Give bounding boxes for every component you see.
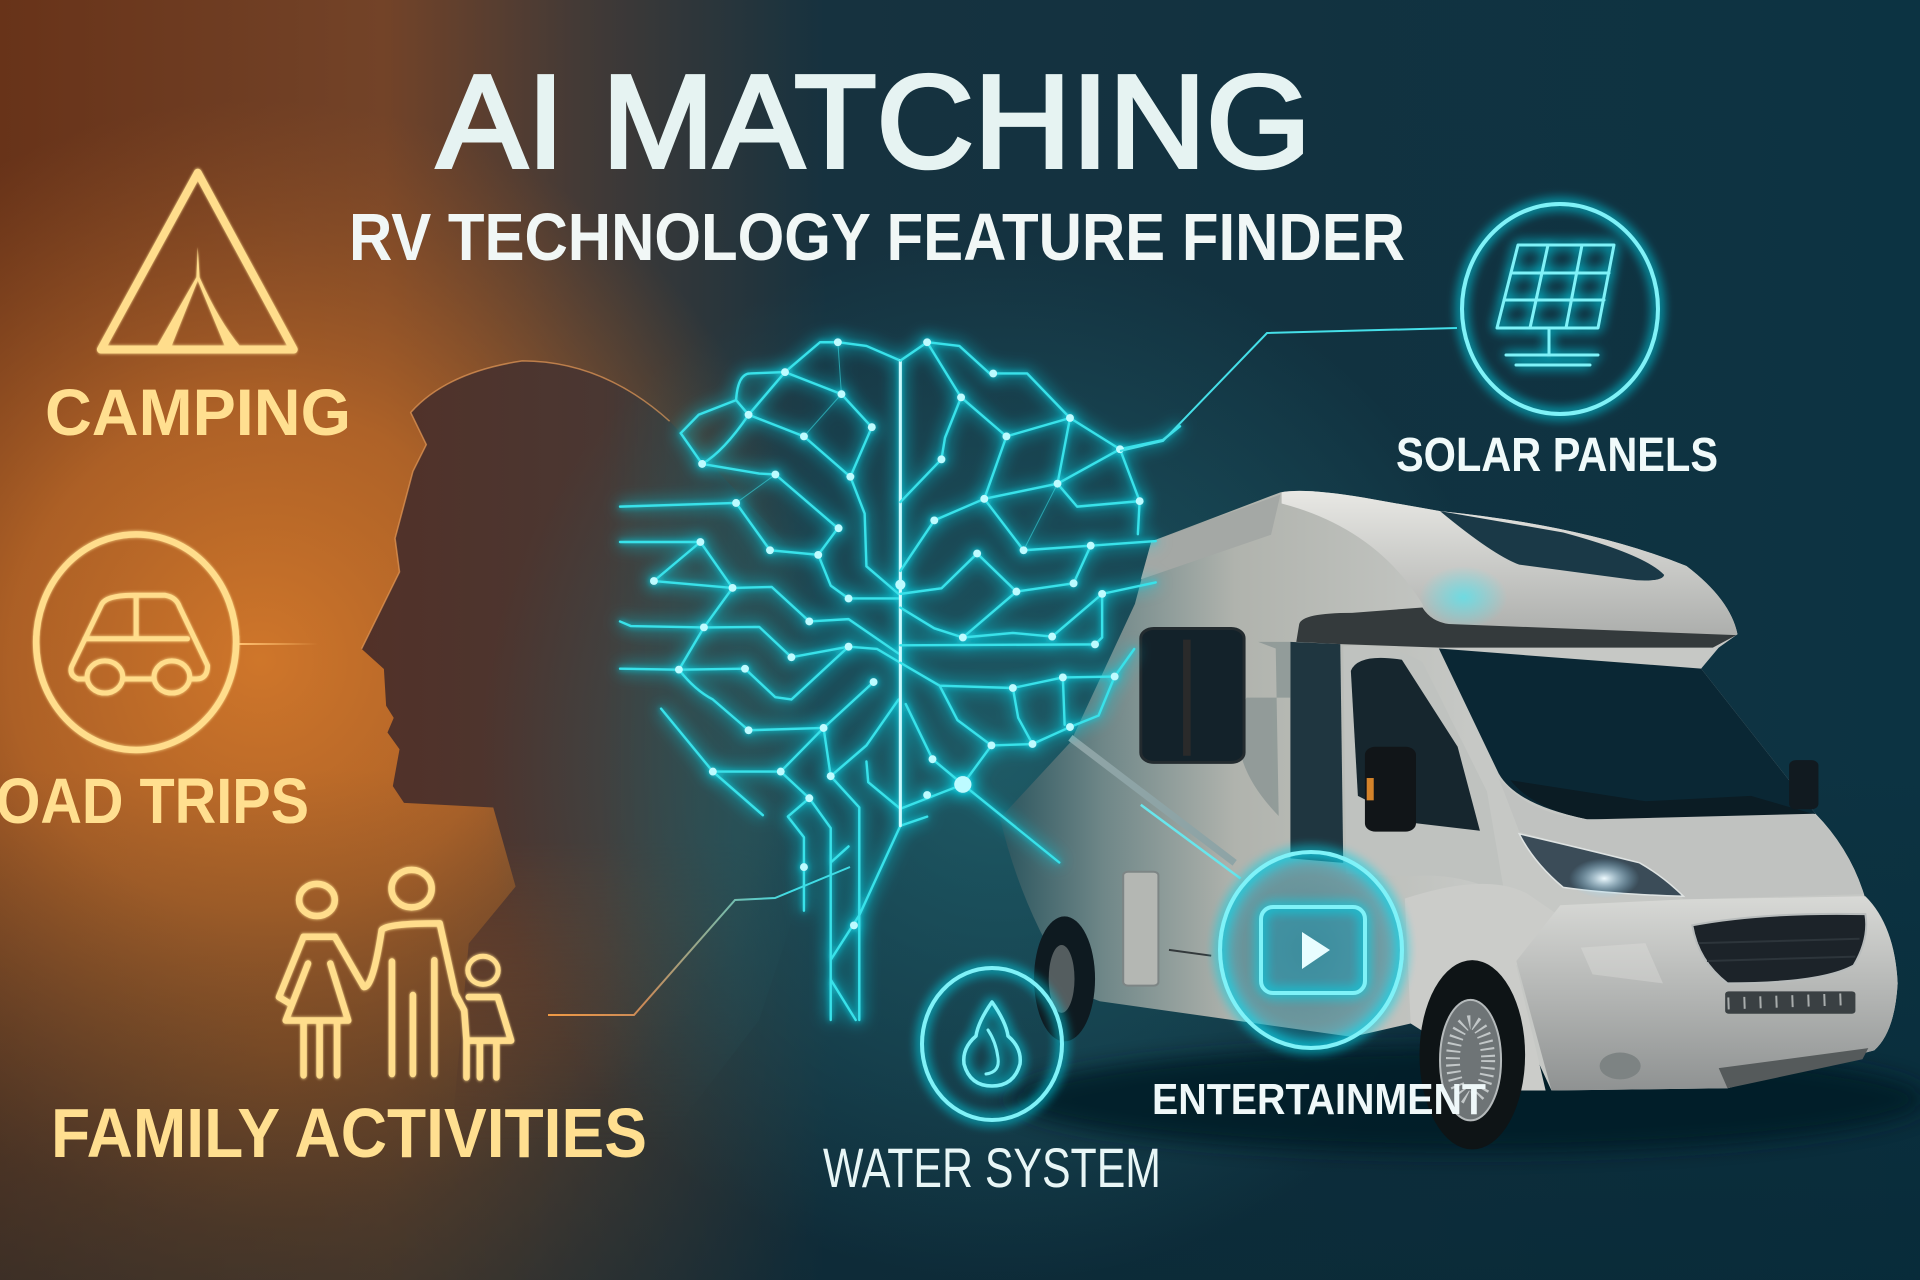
lower vent (1725, 991, 1855, 1014)
RV van (1000, 491, 1920, 1153)
front wheel (1419, 960, 1525, 1149)
cab door window (1351, 658, 1480, 831)
side locker door (1123, 872, 1158, 986)
grille (1692, 914, 1866, 983)
side window divider (1183, 640, 1191, 756)
door pillar shadow (1290, 642, 1343, 863)
icon: family (279, 870, 511, 1077)
van roof solar panel (1440, 511, 1664, 580)
rear wheel (1034, 916, 1095, 1041)
hood (1499, 778, 1864, 899)
label: solar panels: SOLAR PANELS (1396, 429, 1718, 482)
headlight glow (1569, 858, 1640, 899)
vent bars (1728, 999, 1854, 1003)
icon: car in circle (36, 534, 236, 750)
fog cut-out (1581, 943, 1663, 983)
bright side stripe (1141, 805, 1241, 878)
van awning rear section (1141, 495, 1280, 579)
cab door pillar (1343, 646, 1505, 894)
neural network brain (620, 338, 1180, 1020)
rear rim (1049, 945, 1075, 1013)
body shadow (1238, 642, 1290, 816)
headlight (1519, 834, 1684, 896)
icon: water drop (922, 968, 1062, 1120)
label: camping: CAMPING (45, 375, 351, 449)
front rim (1440, 1000, 1501, 1120)
icon: solar panel (1462, 204, 1658, 414)
mirror indicator (1367, 778, 1374, 800)
side mark line (1169, 950, 1211, 956)
van overcab roof (1282, 491, 1737, 646)
subtitle: RV TECHNOLOGY FEATURE FINDER (349, 200, 1405, 275)
van body (1000, 491, 1898, 1090)
wiper shadow (1510, 780, 1813, 819)
label: water system: WATER SYSTEM (823, 1136, 1161, 1199)
human head silhouette (361, 360, 750, 1044)
side mirror (1365, 747, 1416, 832)
far mirror (1789, 760, 1818, 809)
brain glowing nodes (650, 338, 1144, 929)
brain left lines (681, 342, 900, 433)
roof teal glow (1419, 566, 1507, 628)
fog lamp (1600, 1053, 1641, 1079)
icon: tent (101, 173, 294, 350)
side stripes (1070, 738, 1235, 863)
brain centre spine (899, 361, 902, 826)
brain right lines (900, 342, 1180, 449)
connector: family to brain (548, 867, 850, 1015)
shadow under overcab (1296, 607, 1736, 648)
side window (1141, 628, 1244, 762)
grille slats (1698, 939, 1860, 961)
icon: entertainment play (1220, 852, 1402, 1048)
wheel arch panel (1405, 884, 1560, 1090)
label: family activities: FAMILY ACTIVITIES (51, 1094, 647, 1172)
title: AI MATCHING (437, 48, 1311, 195)
front rim spokes (1453, 1022, 1488, 1098)
front bumper (1516, 896, 1898, 1090)
label: entertainment: ENTERTAINMENT (1152, 1075, 1486, 1124)
connector: road trips line (239, 643, 318, 645)
lower intake (1719, 1048, 1868, 1088)
ground shadow under van (1012, 1046, 1920, 1153)
windshield (1439, 649, 1816, 820)
connector: brain to solar panels (1120, 328, 1457, 451)
